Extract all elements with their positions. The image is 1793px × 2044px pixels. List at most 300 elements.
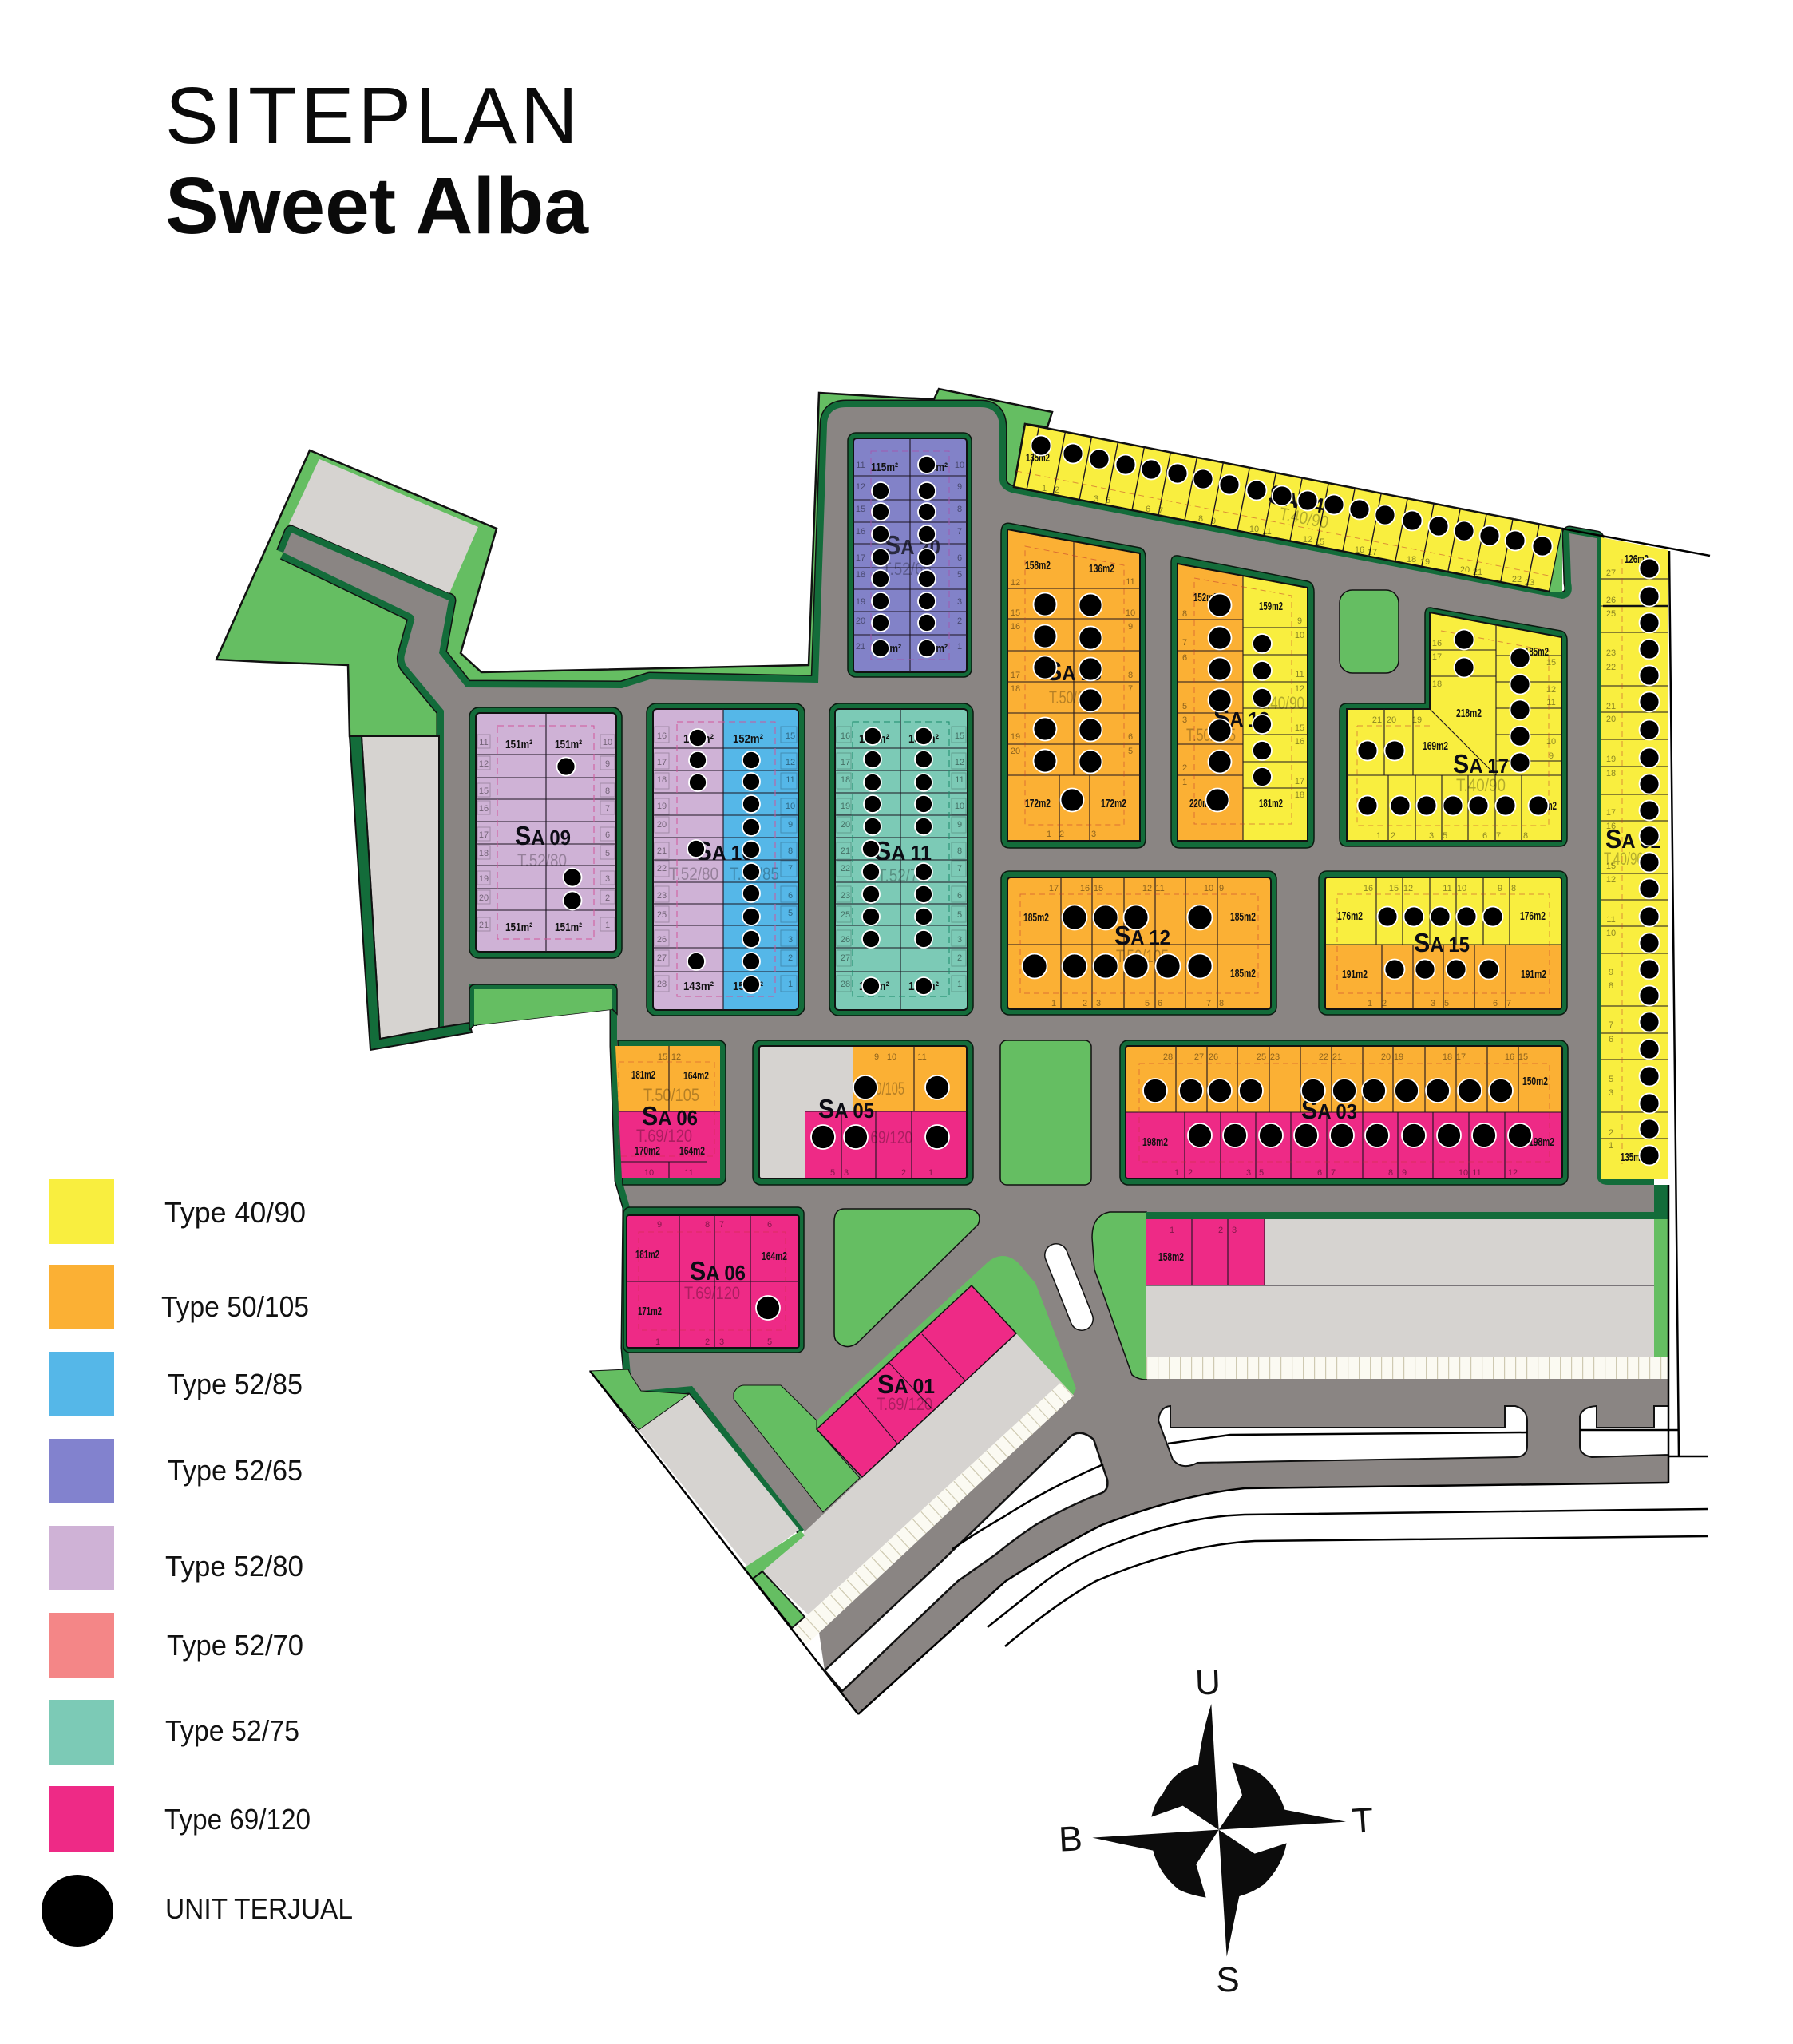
block SA 16: 5 <box>1128 747 1133 756</box>
title <box>165 71 589 251</box>
block SA 03: 18 <box>1443 1052 1452 1062</box>
block SA 02 east strip: 23 <box>1606 648 1616 658</box>
block SA 03: 2 <box>1188 1168 1193 1178</box>
block SA 13: 2 <box>1182 763 1187 773</box>
block SA 11: 15 <box>955 731 964 741</box>
block SA 12: 17 <box>1049 884 1059 893</box>
block SA 09: 10 <box>603 738 612 747</box>
block SA 16: 158m2 <box>1025 559 1051 572</box>
block SA 10: 7 <box>788 864 793 873</box>
block SA 04 north strip: 3 <box>1094 494 1098 504</box>
block SA 02 east strip: 5 <box>1609 1075 1613 1084</box>
block SA 09: 8 <box>605 786 610 796</box>
block SA 17: 6 <box>1482 831 1487 841</box>
block SA 03: 27 <box>1194 1052 1204 1062</box>
block SA 16: 2 <box>1059 830 1064 839</box>
block SA 17: 7 <box>1496 831 1501 841</box>
block SA 15: 1 <box>1368 999 1372 1008</box>
green triangle park <box>834 1209 980 1347</box>
block SA 10: 10 <box>786 802 795 811</box>
legend item: Type 52/85 <box>49 1352 303 1416</box>
block SA 17: 169m2 <box>1423 739 1448 753</box>
block SA 10: 1 <box>788 980 793 989</box>
block SA 20: T.52/65 <box>882 559 932 579</box>
block SA 11: 11 <box>955 775 964 785</box>
block SA 01 <box>817 1285 1016 1477</box>
block SA 02 east strip: 17 <box>1606 808 1616 818</box>
block SA 01: SA 01 <box>877 1369 935 1399</box>
legend item: Type 69/120 <box>49 1786 311 1852</box>
block SA 12: 2 <box>1083 999 1087 1008</box>
block SA 09: 15 <box>479 786 489 796</box>
green park centre <box>1000 1040 1091 1185</box>
block SA 04 north strip: 11 <box>1262 527 1272 537</box>
block SA 05: 9 <box>874 1052 879 1062</box>
block SA 10: T.52/80 <box>669 864 718 884</box>
block SA 06 north: T.50/105 <box>643 1085 699 1105</box>
block SA 04 north strip: 20 <box>1460 565 1470 575</box>
block SA 15: 3 <box>1431 999 1435 1008</box>
block SA 04 north strip: 18 <box>1407 555 1416 564</box>
block SA 06 north: T.69/120 <box>636 1126 692 1146</box>
block SA 03: 150m2 <box>1522 1075 1548 1088</box>
block SA 17: 1 <box>1376 831 1381 841</box>
block SA 09: 19 <box>479 874 489 884</box>
block SA 13: 5 <box>1182 702 1187 711</box>
block SA 10: 8 <box>788 846 793 856</box>
block SA 11: 9 <box>957 820 962 830</box>
legend item: Type 52/80: Type 52/80 <box>165 1550 303 1583</box>
block SA 05: T.69/120 <box>860 1127 912 1147</box>
block SA 09: 16 <box>479 804 489 814</box>
green blob behind SA 01 <box>817 1256 1076 1429</box>
block SA 10: 22 <box>657 864 667 873</box>
block SA 03: 198m2 <box>1529 1135 1554 1149</box>
west dark green edge <box>350 736 472 1050</box>
block SA 11: 20 <box>841 820 850 830</box>
block SA 12: 1 <box>1051 999 1056 1008</box>
block SA 06 south: 9 <box>657 1220 662 1230</box>
block SA 15: 8 <box>1511 884 1516 893</box>
block SA 12: 185m2 <box>1023 911 1049 925</box>
block SA 03: 198m2 <box>1142 1135 1168 1149</box>
block SA 03 <box>1120 1040 1568 1185</box>
block SA 11: 3 <box>957 935 962 945</box>
block SA 06 south: T.69/120 <box>684 1283 740 1303</box>
block SA 02 east strip: 27 <box>1606 568 1616 578</box>
block SA 02 east strip: 11 <box>1606 915 1616 925</box>
block SA 13: T.40/90 <box>1260 693 1304 713</box>
block SA 16: 9 <box>1128 622 1133 632</box>
block SA 12: 3 <box>1096 999 1101 1008</box>
block SA 02 east strip: 2 <box>1609 1128 1613 1138</box>
block SA 20: 2 <box>957 616 962 626</box>
block SA 10: 152m² <box>683 732 714 746</box>
block SA 06 south: 7 <box>719 1220 724 1230</box>
block SA 12: 8 <box>1219 999 1224 1008</box>
block SA 17: 5 <box>1443 831 1447 841</box>
block SA 01 east with gray lots: 158m2 <box>1158 1250 1184 1264</box>
block SA 06 south: 2 <box>705 1337 710 1347</box>
block SA 01 east with gray lots: 2 <box>1218 1226 1223 1235</box>
west gray lot lower <box>362 736 439 1039</box>
west green open space <box>216 389 1052 736</box>
block SA 06 north: 11 <box>684 1168 694 1178</box>
block SA 04 north strip: SA 04 <box>1266 479 1328 519</box>
block SA 01 east with gray lots <box>1146 1219 1668 1357</box>
white diagonal island <box>825 1433 1107 1691</box>
block SA 16: 3 <box>1091 830 1096 839</box>
block SA 02 east strip: 21 <box>1606 702 1616 711</box>
legend item: Type 52/75: Type 52/75 <box>165 1714 299 1747</box>
block SA 04 north strip: 7 <box>1158 506 1163 516</box>
block SA 15: 7 <box>1506 999 1511 1008</box>
block SA 13: 18 <box>1295 790 1304 800</box>
block SA 13 <box>1171 556 1314 848</box>
block SA 03: 15 <box>1518 1052 1528 1062</box>
block SA 20: 9 <box>957 482 962 492</box>
gray roads <box>283 407 1668 1714</box>
green wedge beside SA 01 <box>734 1385 860 1512</box>
block SA 03: 8 <box>1388 1168 1393 1178</box>
block SA 15: 191m2 <box>1521 968 1546 981</box>
block SA 15: 16 <box>1364 884 1373 893</box>
block SA 17: 8 <box>1523 831 1528 841</box>
block SA 11: 12 <box>955 758 964 767</box>
block SA 09: 151m² <box>505 738 532 751</box>
block SA 13: 12 <box>1295 684 1304 694</box>
block SA 20 <box>848 433 972 677</box>
block SA 11: 23 <box>841 891 850 901</box>
block SA 10: 27 <box>657 953 667 963</box>
block SA 04 north strip: 2 <box>1055 485 1059 495</box>
block SA 13: 6 <box>1182 653 1187 663</box>
block SA 10: 15 <box>786 731 795 741</box>
block SA 20: 10 <box>955 461 964 470</box>
block SA 17: 9 <box>1549 751 1554 761</box>
block SA 15 <box>1319 871 1567 1015</box>
legend item: Type 52/80 <box>49 1526 303 1590</box>
block SA 20: 19 <box>856 597 865 607</box>
block SA 03: 19 <box>1394 1052 1403 1062</box>
block SA 11: 28 <box>841 980 850 989</box>
block SA 17: 172m2 <box>1533 799 1557 813</box>
block SA 02 east strip: 126m2 <box>1625 553 1649 566</box>
block SA 03: 21 <box>1332 1052 1342 1062</box>
block SA 12: 15 <box>1094 884 1103 893</box>
block SA 16: 19 <box>1011 732 1020 742</box>
parking strip light gray <box>762 1333 1061 1615</box>
block SA 20: 17 <box>856 553 865 563</box>
block SA 20: 115m² <box>920 642 948 656</box>
block SA 02 east strip: 19 <box>1606 755 1616 764</box>
block SA 12: 9 <box>1219 884 1224 893</box>
block SA 06 south: 5 <box>767 1337 772 1347</box>
block SA 01 east with gray lots: 3 <box>1232 1226 1237 1235</box>
block SA 13: 181m2 <box>1259 797 1283 810</box>
block SA 06 south: 164m2 <box>762 1250 787 1263</box>
block SA 10: 12 <box>786 758 795 767</box>
block SA 17: 12 <box>1546 685 1556 695</box>
block SA 01 east with gray lots: 1 <box>1170 1226 1174 1235</box>
block SA 05: T.50/105 <box>860 1079 904 1099</box>
block SA 06 south: 1 <box>655 1337 660 1347</box>
block SA 13: 9 <box>1297 616 1302 626</box>
block SA 10: 19 <box>657 802 667 811</box>
block SA 12: 12 <box>1142 884 1152 893</box>
block SA 13: 152m2 <box>1193 591 1217 604</box>
block SA 15: SA 15 <box>1414 928 1470 957</box>
block SA 16: 11 <box>1126 577 1135 587</box>
block SA 04 north strip: 12 <box>1303 535 1312 545</box>
legend item: Type 52/70 <box>49 1613 303 1678</box>
block SA 04 north strip: 19 <box>1420 557 1430 567</box>
green block south of SA 09 <box>469 984 617 1030</box>
block SA 02 east strip: 12 <box>1606 875 1616 885</box>
road edge border <box>283 407 1654 1530</box>
block SA 15: 10 <box>1457 884 1466 893</box>
block SA 03: 28 <box>1163 1052 1173 1062</box>
block SA 13: T.50/105 <box>1186 725 1236 745</box>
block SA 06 south: SA 06 <box>690 1256 746 1285</box>
block SA 12: T.50/105 <box>1116 946 1169 966</box>
block SA 13: 3 <box>1182 715 1187 725</box>
legend item: Type 52/65: Type 52/65 <box>168 1454 303 1487</box>
block SA 02 east strip: 135m2 <box>1621 1151 1645 1164</box>
block SA 12: 6 <box>1158 999 1162 1008</box>
block SA 02 east strip: 26 <box>1606 596 1616 605</box>
block SA 10: T.52/85 <box>730 864 779 884</box>
block SA 12: 7 <box>1206 999 1211 1008</box>
legend <box>42 1179 353 1947</box>
block SA 11: 7 <box>957 864 962 873</box>
block SA 03: 20 <box>1381 1052 1391 1062</box>
compass label S: S <box>1216 1960 1240 1999</box>
block SA 03: 7 <box>1331 1168 1336 1178</box>
block SA 04 north strip: 135m2 <box>1026 451 1050 465</box>
block SA 09: 151m² <box>555 921 582 934</box>
block SA 11: SA 11 <box>874 836 932 866</box>
block SA 03: 25 <box>1257 1052 1266 1062</box>
block SA 03: 26 <box>1209 1052 1218 1062</box>
block SA 17: T.40/90 <box>1456 775 1506 795</box>
legend item: Type 50/105 <box>49 1265 309 1329</box>
white median pill <box>1056 1255 1082 1319</box>
block SA 05: 3 <box>844 1168 849 1178</box>
block SA 16: 20 <box>1011 747 1020 756</box>
block SA 04 north strip: 5 <box>1106 496 1110 505</box>
block SA 11: 138m² <box>859 732 889 746</box>
block SA 09: 3 <box>605 874 610 884</box>
block SA 11: 8 <box>957 846 962 856</box>
block SA 17: 2 <box>1391 831 1395 841</box>
block SA 15: 191m2 <box>1342 968 1368 981</box>
block SA 16: 7 <box>1128 684 1133 694</box>
block SA 15: 11 <box>1443 884 1452 893</box>
block SA 20: 18 <box>856 570 865 580</box>
block SA 03: 6 <box>1317 1168 1322 1178</box>
block SA 02 east strip: 20 <box>1606 715 1616 724</box>
block SA 16: 8 <box>1128 671 1133 680</box>
block SA 03: 10 <box>1459 1168 1468 1178</box>
block SA 11: 22 <box>841 864 850 873</box>
block SA 02 east strip: 22 <box>1606 663 1616 672</box>
site map <box>216 389 1710 1714</box>
block SA 16: 6 <box>1128 732 1133 742</box>
block SA 11: 16 <box>841 731 850 741</box>
legend item: unit terjual <box>42 1875 353 1947</box>
block SA 15: 2 <box>1382 999 1387 1008</box>
block SA 13: 10 <box>1295 631 1304 640</box>
block SA 20: 115m² <box>871 461 898 474</box>
block SA 20: 1 <box>957 642 962 652</box>
legend item: unit terjual: UNIT TERJUAL <box>165 1892 353 1925</box>
block SA 16: 10 <box>1126 608 1135 618</box>
block SA 11: 10 <box>955 802 964 811</box>
block SA 10: 21 <box>657 846 667 856</box>
block SA 03: SA 03 <box>1301 1095 1357 1124</box>
block SA 17: 21 <box>1372 715 1382 725</box>
block SA 12: 11 <box>1155 884 1165 893</box>
block SA 05: 2 <box>901 1168 906 1178</box>
legend item: Type 40/90 <box>49 1179 306 1244</box>
block SA 06 south <box>623 1207 804 1353</box>
block SA 02 east strip: 9 <box>1609 968 1613 977</box>
legend item: Type 52/75 <box>49 1700 299 1765</box>
block SA 10: 2 <box>788 953 793 963</box>
block SA 15: 176m2 <box>1337 909 1363 923</box>
block SA 10: 11 <box>786 775 795 785</box>
block SA 12: 10 <box>1204 884 1213 893</box>
block SA 02 east strip <box>1601 537 1668 1179</box>
lower-west gray lot <box>639 1394 799 1567</box>
block SA 17: 19 <box>1412 715 1422 725</box>
block SA 11: 138m² <box>859 980 889 993</box>
block SA 02 east strip: SA 02 <box>1605 824 1661 854</box>
block SA 17: 18 <box>1432 679 1442 689</box>
block SA 11: 17 <box>841 758 850 767</box>
block SA 20: 12 <box>856 482 865 492</box>
block SA 02 east strip: T.40/90 <box>1604 849 1644 869</box>
block SA 02 east strip: 6 <box>1609 1035 1613 1044</box>
block SA 20: 15 <box>856 505 865 514</box>
block SA 11: 5 <box>957 910 962 920</box>
block SA 06 north: 164m2 <box>679 1144 705 1158</box>
block SA 09: 18 <box>479 849 489 858</box>
block SA 09: 7 <box>605 804 610 814</box>
block SA 13: 8 <box>1182 609 1187 619</box>
block SA 17: 3 <box>1429 831 1434 841</box>
south boundary line <box>590 1371 858 1714</box>
lower-west green <box>590 1369 689 1430</box>
block SA 04 north strip: 23 <box>1525 578 1534 588</box>
block SA 04 north strip: 16 <box>1355 545 1364 555</box>
block SA 02 east strip: 25 <box>1606 609 1616 619</box>
block SA 03: 5 <box>1259 1168 1264 1178</box>
block SA 09: 2 <box>605 893 610 903</box>
legend item: Type 40/90: Type 40/90 <box>164 1196 306 1229</box>
block SA 16: 15 <box>1011 608 1020 618</box>
block SA 04 north strip: 6 <box>1146 505 1150 514</box>
block SA 06 north: 15 <box>658 1052 667 1062</box>
compass star <box>1092 1704 1346 1957</box>
block SA 02 east strip: 15 <box>1606 862 1616 871</box>
block SA 13: 16 <box>1295 737 1304 747</box>
block SA 02 east strip: 16 <box>1606 822 1616 831</box>
block SA 13: 11 <box>1295 670 1304 679</box>
block SA 05: 5 <box>830 1168 835 1178</box>
title: SITEPLAN <box>165 71 578 160</box>
block SA 02 east strip: 3 <box>1609 1088 1613 1098</box>
block SA 09: 20 <box>479 893 489 903</box>
block SA 20: SA 20 <box>885 530 940 560</box>
block SA 10: 6 <box>788 891 793 901</box>
block SA 20: 115m² <box>920 461 948 474</box>
block SA 20: 6 <box>957 553 962 563</box>
block SA 10: 28 <box>657 980 667 989</box>
block SA 05: SA 05 <box>818 1094 874 1123</box>
block SA 04 north strip: 10 <box>1249 525 1259 534</box>
block SA 12: 5 <box>1145 999 1150 1008</box>
block SA 03: 12 <box>1508 1168 1518 1178</box>
block SA 03: 17 <box>1456 1052 1466 1062</box>
block SA 13: 15 <box>1295 723 1304 733</box>
block SA 10: 17 <box>657 758 667 767</box>
diagonal parking stalls <box>793 1382 1074 1645</box>
block SA 04 north strip: 9 <box>1211 517 1216 526</box>
small green sliver <box>745 1531 805 1579</box>
block SA 11: 27 <box>841 953 850 963</box>
block SA 13: 7 <box>1182 638 1187 648</box>
block SA 12: 185m2 <box>1230 910 1256 924</box>
compass label T: T <box>1351 1800 1375 1841</box>
block SA 03: 3 <box>1246 1168 1251 1178</box>
block SA 20: 5 <box>957 570 962 580</box>
legend item: Type 52/70: Type 52/70 <box>167 1629 303 1662</box>
block SA 12: SA 12 <box>1114 921 1170 950</box>
block SA 15: 5 <box>1444 999 1449 1008</box>
block SA 16: 172m2 <box>1101 797 1126 810</box>
block SA 10: 18 <box>657 775 667 785</box>
block SA 06 south: 6 <box>767 1220 772 1230</box>
legend item: Type 52/85: Type 52/85 <box>168 1368 303 1400</box>
block SA 12 <box>1001 871 1276 1015</box>
dark green band south-east <box>1146 1185 1668 1219</box>
block SA 16 <box>1001 523 1146 848</box>
block SA 12: 185m2 <box>1230 967 1256 980</box>
compass label B: B <box>1058 1819 1083 1860</box>
block SA 12: 16 <box>1080 884 1090 893</box>
block SA 04 north strip: 1 <box>1042 484 1047 493</box>
block SA 20: 3 <box>957 597 962 607</box>
green pond <box>1340 590 1399 673</box>
block SA 06 north: SA 06 <box>642 1101 698 1131</box>
block SA 13: SA 13 <box>1213 703 1269 732</box>
block SA 03: 9 <box>1402 1168 1407 1178</box>
block SA 13: 220m2 <box>1189 797 1213 810</box>
block SA 01: T.69/120 <box>877 1394 932 1414</box>
block SA 17: 16 <box>1432 639 1442 648</box>
block SA 06 north: 10 <box>644 1168 654 1178</box>
block SA 09: 151m² <box>555 738 582 751</box>
block SA 04 north strip: 22 <box>1512 575 1522 584</box>
block SA 11: 21 <box>841 846 850 856</box>
block SA 11: 19 <box>841 802 850 811</box>
block SA 15: 176m2 <box>1520 909 1546 923</box>
block SA 16: T.50/105 <box>1049 687 1098 707</box>
block SA 02 east strip: 10 <box>1606 929 1616 938</box>
block SA 17 <box>1340 608 1567 846</box>
